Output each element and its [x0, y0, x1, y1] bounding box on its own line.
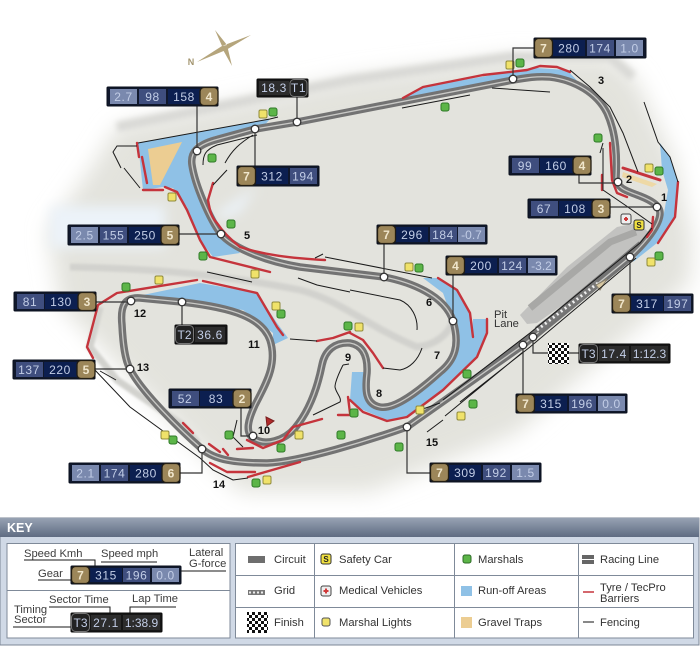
- data box: turn 1: [528, 199, 610, 218]
- timing points: [126, 75, 661, 453]
- sample speed box: 0.0: [156, 568, 175, 582]
- data box: turn 1: 67: [537, 202, 551, 216]
- circuit map: [48, 48, 692, 492]
- speed labels: [24, 547, 226, 580]
- data box: turn 13: 220: [49, 363, 71, 377]
- data box: turn 10: 2: [239, 392, 246, 406]
- data box: 296 184: 296: [401, 228, 423, 242]
- data box: 296 184: -0.7: [461, 228, 482, 242]
- compass: N: [188, 57, 194, 67]
- pit building roof: [530, 232, 636, 308]
- turn numbers: 15: [426, 437, 438, 449]
- data box: turn 4: 4: [206, 90, 213, 104]
- circuit: [122, 77, 660, 463]
- data box: sector T3: 1:12.3: [633, 347, 667, 361]
- land area: [48, 57, 692, 492]
- data box: turn 3: [534, 38, 646, 58]
- data box: 312 194: 194: [292, 170, 314, 184]
- data box: 309 192: [430, 463, 541, 482]
- pit building: [520, 223, 650, 324]
- data box: turn 5: [68, 225, 179, 245]
- data box: turn 3: 174: [589, 42, 611, 56]
- fencing: [93, 70, 678, 480]
- pit lane label: Pit: [494, 309, 508, 321]
- data box: sector T2: [175, 325, 227, 344]
- legend: medical vehicles: Medical Vehicles: [339, 585, 423, 597]
- speed labels: Gear: [38, 568, 63, 580]
- data box: turn 12: 3: [84, 295, 91, 309]
- timing labels: [13, 593, 178, 627]
- data box: sector T1: T1: [291, 81, 306, 95]
- data box: sector T3: T3: [581, 347, 596, 361]
- gravel trap: [148, 142, 182, 185]
- data box: turn 14: 2.1: [76, 466, 95, 480]
- data box: 296 184: 7: [383, 228, 390, 242]
- data box: turn 2: 160: [545, 159, 567, 173]
- starting grid: [537, 283, 598, 330]
- turn numbers: 2: [626, 174, 632, 186]
- data box: 317 197: [612, 294, 693, 313]
- data box: 315 196: [516, 394, 627, 413]
- leader lines: [95, 48, 657, 473]
- data box: 317 197: 197: [667, 297, 688, 311]
- speed labels: Lateral: [189, 547, 223, 559]
- icon: red marker: [266, 417, 274, 426]
- data box: turn 10: 52: [178, 392, 192, 406]
- data box: turn 4: [107, 87, 218, 106]
- legend: grid: Grid: [274, 585, 295, 597]
- timing labels: Sector Time: [49, 594, 109, 606]
- data box: turn 13: 5: [83, 363, 90, 377]
- legend: barriers: Barriers: [600, 593, 640, 605]
- data box: 296 184: [377, 225, 487, 244]
- grid arrow: [596, 279, 607, 290]
- data box: 315 196: 7: [522, 397, 529, 411]
- legend: barriers: Tyre / TecPro: [600, 582, 666, 594]
- data box: turn 14: [69, 463, 180, 483]
- data box: turn 4: 158: [173, 90, 195, 104]
- turn numbers: 10: [258, 425, 270, 437]
- sample timing box: [71, 613, 162, 632]
- legend: grid: [248, 585, 295, 597]
- data box: sector T3: [579, 344, 670, 363]
- data box: 200 124: 124: [501, 259, 523, 273]
- data box: 200 124: 4: [452, 259, 459, 273]
- data box: turn 5: 2.5: [75, 228, 94, 242]
- marshals: [122, 59, 663, 487]
- icon: medical vehicles: [621, 214, 631, 224]
- sample speed box: 315: [95, 568, 117, 582]
- data box: 317 197: 317: [636, 297, 658, 311]
- turn numbers: 11: [248, 339, 260, 351]
- pale water: [50, 186, 257, 248]
- data box: 312 194: 312: [261, 170, 283, 184]
- data box: turn 1: 108: [564, 202, 586, 216]
- data box: turn 1: 3: [598, 202, 605, 216]
- data box: 309 192: 192: [485, 466, 507, 480]
- speed labels: G-force: [189, 558, 226, 570]
- data box: turn 12: [14, 292, 96, 311]
- data box: turn 4: 98: [145, 90, 160, 104]
- pit lane label: Lane: [494, 318, 519, 330]
- turn numbers: 7: [434, 350, 440, 362]
- speed labels: Speed mph: [101, 548, 158, 560]
- data box: 315 196: 0.0: [602, 397, 621, 411]
- run-off areas: [138, 68, 678, 420]
- turn numbers: 13: [137, 362, 149, 374]
- data box: 200 124: 200: [470, 259, 492, 273]
- data box: turn 3: 280: [558, 42, 580, 56]
- sample speed box: [71, 566, 181, 584]
- data box: 296 184: 184: [432, 228, 454, 242]
- sample speed box: 196: [126, 568, 147, 582]
- data box: turn 4: 2.7: [114, 90, 133, 104]
- pit lane: [443, 243, 640, 402]
- data box: turn 3: 1.0: [620, 42, 639, 56]
- grid slots: [537, 283, 598, 330]
- marshal lights: [155, 61, 655, 484]
- sample speed box: 7: [77, 568, 84, 582]
- turn numbers: 5: [244, 230, 250, 242]
- legend: finish: Finish: [274, 617, 304, 629]
- sample timing box: T3: [73, 616, 88, 630]
- turn numbers: 9: [345, 352, 351, 364]
- data box: 200 124: -3.2: [531, 259, 552, 273]
- data box: turn 2: 4: [579, 159, 586, 173]
- data box: sector T2: 36.6: [197, 328, 223, 342]
- legend: circuit: Circuit: [274, 554, 307, 566]
- data box: 315 196: 196: [571, 397, 593, 411]
- data box: turn 10: [169, 389, 251, 408]
- data box: 312 194: [237, 166, 319, 186]
- data box: turn 5: 155: [103, 228, 124, 242]
- key panel: [0, 518, 699, 645]
- tyre barriers: [87, 66, 678, 477]
- legend: circuit: [248, 554, 307, 566]
- data box: turn 12: 81: [23, 295, 37, 309]
- turn numbers: [134, 75, 667, 491]
- sample timing box: 27.1: [93, 616, 119, 630]
- data box: turn 14: 6: [168, 466, 175, 480]
- timing labels: Timing: [14, 604, 47, 616]
- legend: barriers: [583, 582, 666, 605]
- key: legend table: [235, 543, 694, 638]
- data box: sector T3: 17.4: [601, 347, 627, 361]
- data box: turn 2: [509, 156, 591, 175]
- data box: turn 14: 174: [104, 466, 125, 480]
- data box: 309 192: 1.5: [516, 466, 535, 480]
- finish flag: [548, 343, 569, 364]
- turn numbers: 12: [134, 308, 146, 320]
- data box: turn 2: 99: [518, 159, 532, 173]
- top edge shading: [117, 57, 633, 127]
- data box: 317 197: 7: [618, 297, 625, 311]
- timing labels: Sector: [14, 614, 47, 626]
- legend: racing line: Racing Line: [600, 554, 659, 566]
- speed labels: Speed Kmh: [24, 548, 82, 560]
- key: how to read data boxes: [7, 544, 230, 638]
- data box: turn 10: 83: [209, 392, 223, 406]
- key header: [0, 518, 699, 537]
- icon: safety car: S: [636, 221, 642, 230]
- gravel trap: tan stripe at turn 1: [622, 172, 657, 187]
- legend: marshal lights: Marshal Lights: [339, 617, 412, 629]
- data box: turn 3: 7: [540, 42, 547, 56]
- key title: KEY: [7, 521, 33, 535]
- data box: turn 13: [13, 360, 95, 379]
- data box: 200 124: [446, 256, 557, 275]
- turn numbers: 14: [213, 479, 226, 491]
- turn numbers: 3: [598, 75, 604, 87]
- data box: turn 13: 137: [18, 363, 40, 377]
- turn numbers: 1: [661, 192, 667, 204]
- data box: 312 194: 7: [243, 170, 250, 184]
- legend: finish: [247, 612, 304, 633]
- turn numbers: 8: [376, 388, 382, 400]
- data box: sector T1: 18.3: [261, 81, 287, 95]
- icon: safety car: [634, 220, 644, 230]
- legend: gravel traps: Gravel Traps: [478, 617, 542, 629]
- compass: [188, 30, 251, 67]
- data box: 309 192: 309: [454, 466, 476, 480]
- sample timing box: 1:38.9: [125, 616, 159, 630]
- data box: turn 5: 5: [167, 228, 174, 242]
- legend: fencing: Fencing: [600, 617, 640, 629]
- data box: turn 5: 250: [134, 228, 156, 242]
- data box: turn 14: 280: [135, 466, 157, 480]
- data box: 315 196: 315: [540, 397, 562, 411]
- legend: safety car: S: [323, 555, 329, 564]
- legend: safety car: Safety Car: [339, 554, 392, 566]
- data box: sector T2: T2: [177, 328, 192, 342]
- data box: sector T1: [257, 79, 308, 97]
- key background: [0, 518, 699, 645]
- data box: 309 192: 7: [436, 466, 443, 480]
- data box: turn 12: 130: [50, 295, 72, 309]
- turn numbers: 6: [426, 297, 432, 309]
- timing labels: Lap Time: [132, 593, 178, 605]
- legend: run-off areas: Run-off Areas: [478, 585, 547, 597]
- legend: marshals: Marshals: [478, 554, 524, 566]
- service roads: [70, 267, 453, 443]
